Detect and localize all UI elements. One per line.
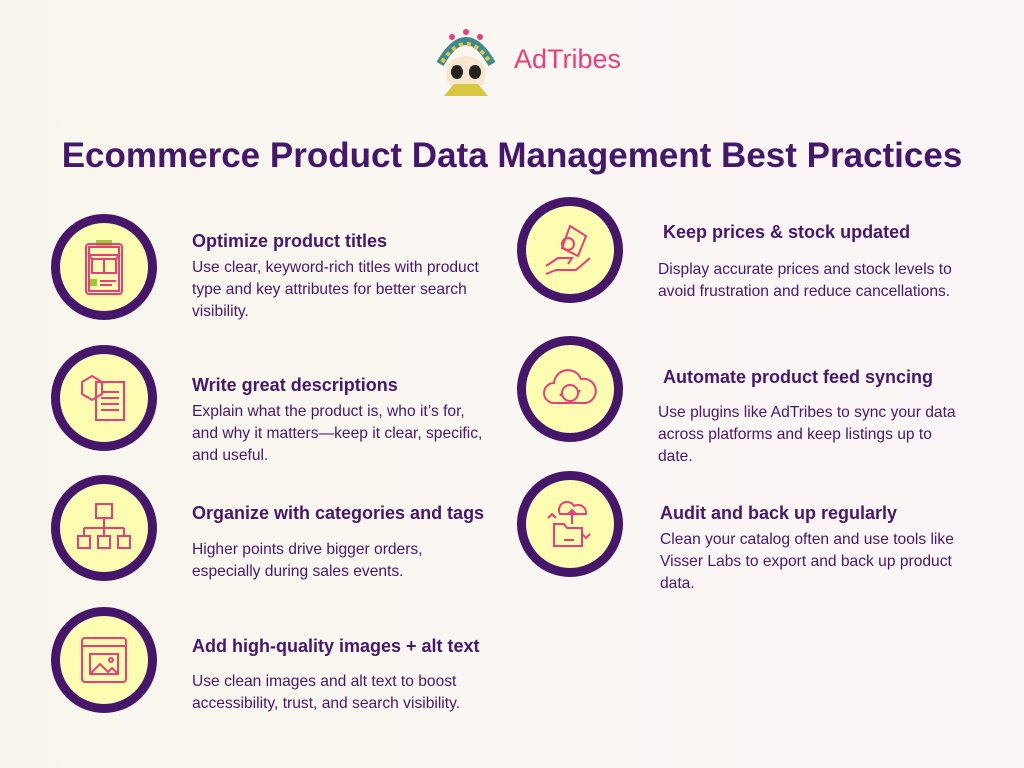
item: descriptions (51, 345, 482, 464)
text: Clean your catalog often and use tools like Visser Labs to export and back up product data. (660, 531, 954, 592)
title: Ecommerce Product Data Management Best Practices (62, 136, 962, 175)
icon: cloud sync (517, 336, 623, 442)
item: audit (517, 471, 954, 592)
item: optimize titles (51, 214, 479, 320)
item: categories (51, 475, 484, 581)
text: Explain what the product is, who it’s for, (192, 403, 465, 420)
icon: hierarchy (51, 475, 157, 581)
icon: clipboard box (51, 214, 157, 320)
icon: document (51, 345, 157, 451)
text: Display accurate prices and stock levels to avoid frustration and reduce cancellations. (658, 261, 952, 300)
text: Use clear, keyword-rich titles with product type and key attributes for better search visibility. (192, 259, 479, 320)
text: Higher points drive bigger orders, especially during sales events. (192, 541, 423, 580)
brand name: AdTribes (514, 44, 621, 74)
text (192, 403, 482, 464)
text: and why it matters—keep it clear, specific, (192, 425, 482, 442)
logo (436, 29, 621, 96)
icon: folder cloud (517, 471, 623, 577)
icon: panda (436, 29, 496, 96)
heading: Write great descriptions (192, 375, 398, 395)
heading: Organize with categories and tags (192, 503, 484, 523)
text: Use clean images and alt text to boost accessibility, trust, and search visibility. (192, 673, 460, 712)
item: prices (517, 197, 952, 303)
item: feed syncing (517, 336, 956, 465)
icon: image window (51, 607, 157, 713)
icon: price tag hand (517, 197, 623, 303)
heading: Add high-quality images + alt text (192, 636, 480, 656)
text: Use plugins like AdTribes to sync your data across platforms and keep listings up to date. (658, 404, 956, 465)
heading: Automate product feed syncing (663, 367, 933, 387)
text: and useful. (192, 447, 268, 464)
heading: Keep prices & stock updated (663, 222, 910, 242)
heading: Audit and back up regularly (660, 503, 897, 523)
heading: Optimize product titles (192, 231, 387, 251)
item: images (51, 607, 480, 713)
